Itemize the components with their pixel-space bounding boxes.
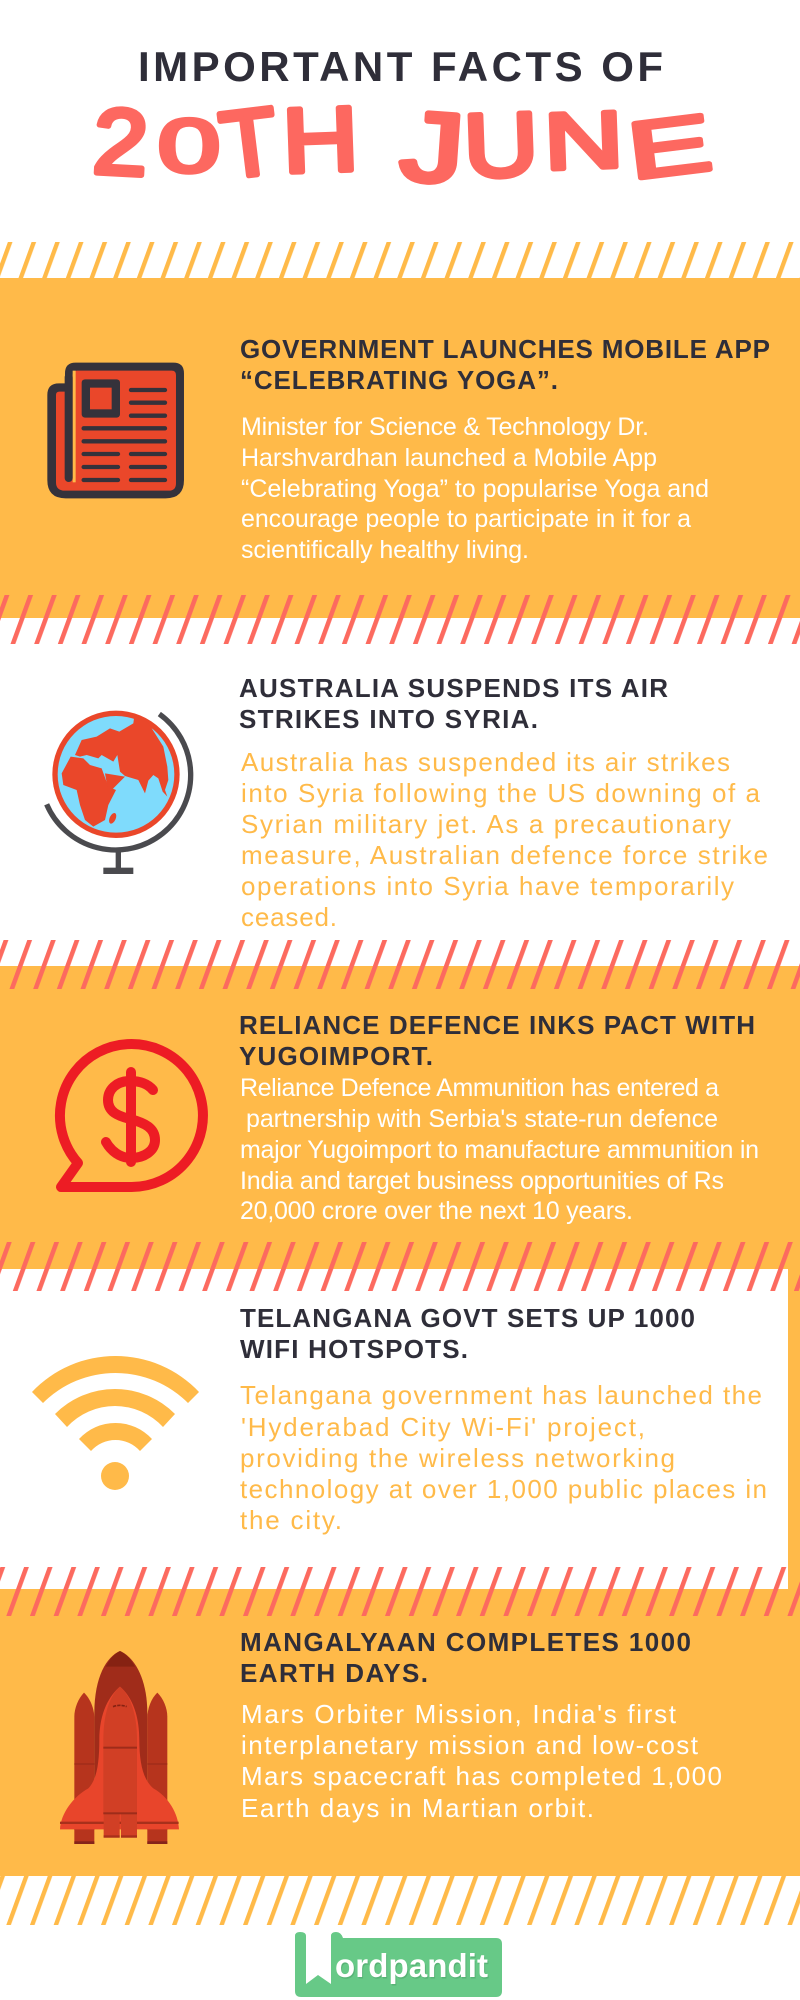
body text: partnership with Serbia's state-run defence xyxy=(246,1105,718,1133)
heading: AUSTRALIA SUSPENDS ITS AIR xyxy=(239,673,668,703)
body text: Harshvardhan launched a Mobile App xyxy=(241,444,657,472)
body text: interplanetary mission and low-cost xyxy=(241,1730,699,1760)
icon: bookmark xyxy=(306,1932,331,1984)
body text: Mars Orbiter Mission, India's first xyxy=(241,1699,677,1729)
heading: 20th june: 0 xyxy=(158,105,220,189)
heading: STRIKES INTO SYRIA. xyxy=(239,704,538,734)
body text xyxy=(241,413,709,564)
body text: providing the wireless networking xyxy=(240,1443,675,1473)
heading xyxy=(239,673,668,734)
body text: operations into Syria have temporarily xyxy=(241,871,734,901)
heading: 20th june: 2 xyxy=(91,90,151,196)
body text: Mars spacecraft has completed 1,000 xyxy=(241,1761,722,1791)
heading: 20th june: J xyxy=(397,90,467,204)
wordmark: ordpandit xyxy=(335,1947,488,1984)
body text: technology at over 1,000 public places in xyxy=(240,1474,767,1504)
body text: 20,000 crore over the next 10 years. xyxy=(240,1197,633,1225)
heading: 20th june: E xyxy=(623,98,717,196)
heading: RELIANCE DEFENCE INKS PACT WITH xyxy=(239,1010,755,1040)
heading: WIFI HOTSPOTS. xyxy=(240,1334,468,1364)
body text: Telangana government has launched the xyxy=(240,1380,762,1410)
body text: “Celebrating Yoga” to popularise Yoga and xyxy=(241,475,709,503)
heading: 20th june: N xyxy=(542,95,625,187)
body text: Australia has suspended its air strikes xyxy=(241,747,730,777)
body text: the city. xyxy=(240,1505,342,1535)
body text: 'Hyderabad City Wi-Fi' project, xyxy=(241,1412,645,1442)
panel: mobile app xyxy=(0,278,800,618)
heading: EARTH DAYS. xyxy=(240,1658,428,1688)
title xyxy=(91,43,717,204)
panel: australia xyxy=(0,618,800,966)
heading xyxy=(240,1303,695,1364)
heading: 20th june: U xyxy=(462,94,540,197)
heading: YUGOIMPORT. xyxy=(239,1041,433,1071)
body text: major Yugoimport to manufacture ammunition in xyxy=(240,1136,759,1164)
heading xyxy=(239,1010,755,1071)
heading xyxy=(240,1627,691,1688)
body text xyxy=(240,1074,759,1225)
wordmark: ordpandit xyxy=(336,1948,489,1986)
icon: dollar speech bubble xyxy=(60,1044,203,1187)
panel: reliance defence xyxy=(0,966,800,1269)
body text: scientifically healthy living. xyxy=(241,536,529,564)
logo: wordpandit xyxy=(295,1932,502,1997)
panel: mangalyaan xyxy=(0,1589,800,1876)
heading: TELANGANA GOVT SETS UP 1000 xyxy=(240,1303,695,1333)
body text: ceased. xyxy=(241,902,337,932)
heading: “CELEBRATING YOGA”. xyxy=(240,365,558,395)
body text: India and target business opportunities of Rs xyxy=(240,1167,724,1195)
icon: globe xyxy=(47,711,191,874)
heading xyxy=(240,334,770,395)
body text: Reliance Defence Ammunition has entered a xyxy=(240,1074,719,1102)
panel: telangana xyxy=(0,1269,800,1589)
body text xyxy=(241,747,768,932)
body text: encourage people to participate in it for a xyxy=(241,505,691,533)
heading: 20th june: T xyxy=(215,87,283,198)
heading: GOVERNMENT LAUNCHES MOBILE APP xyxy=(240,334,770,364)
body text xyxy=(241,1699,722,1823)
body text: Earth days in Martian orbit. xyxy=(241,1793,594,1823)
icon: wifi xyxy=(32,1356,199,1490)
icon: newspaper xyxy=(47,363,184,498)
body text: into Syria following the US downing of a xyxy=(241,778,761,808)
body text xyxy=(240,1380,767,1535)
body text: Syrian military jet. As a precautionary xyxy=(241,809,731,839)
icon: space shuttle xyxy=(60,1651,179,1844)
heading: 20th june xyxy=(91,87,717,204)
heading: MANGALYAAN COMPLETES 1000 xyxy=(240,1627,691,1657)
heading: 20th june: H xyxy=(281,87,360,192)
body text: measure, Australian defence force strike xyxy=(241,840,768,870)
heading: important facts of: IMPORTANT FACTS OF xyxy=(138,43,663,90)
body text: Minister for Science & Technology Dr. xyxy=(241,413,649,441)
